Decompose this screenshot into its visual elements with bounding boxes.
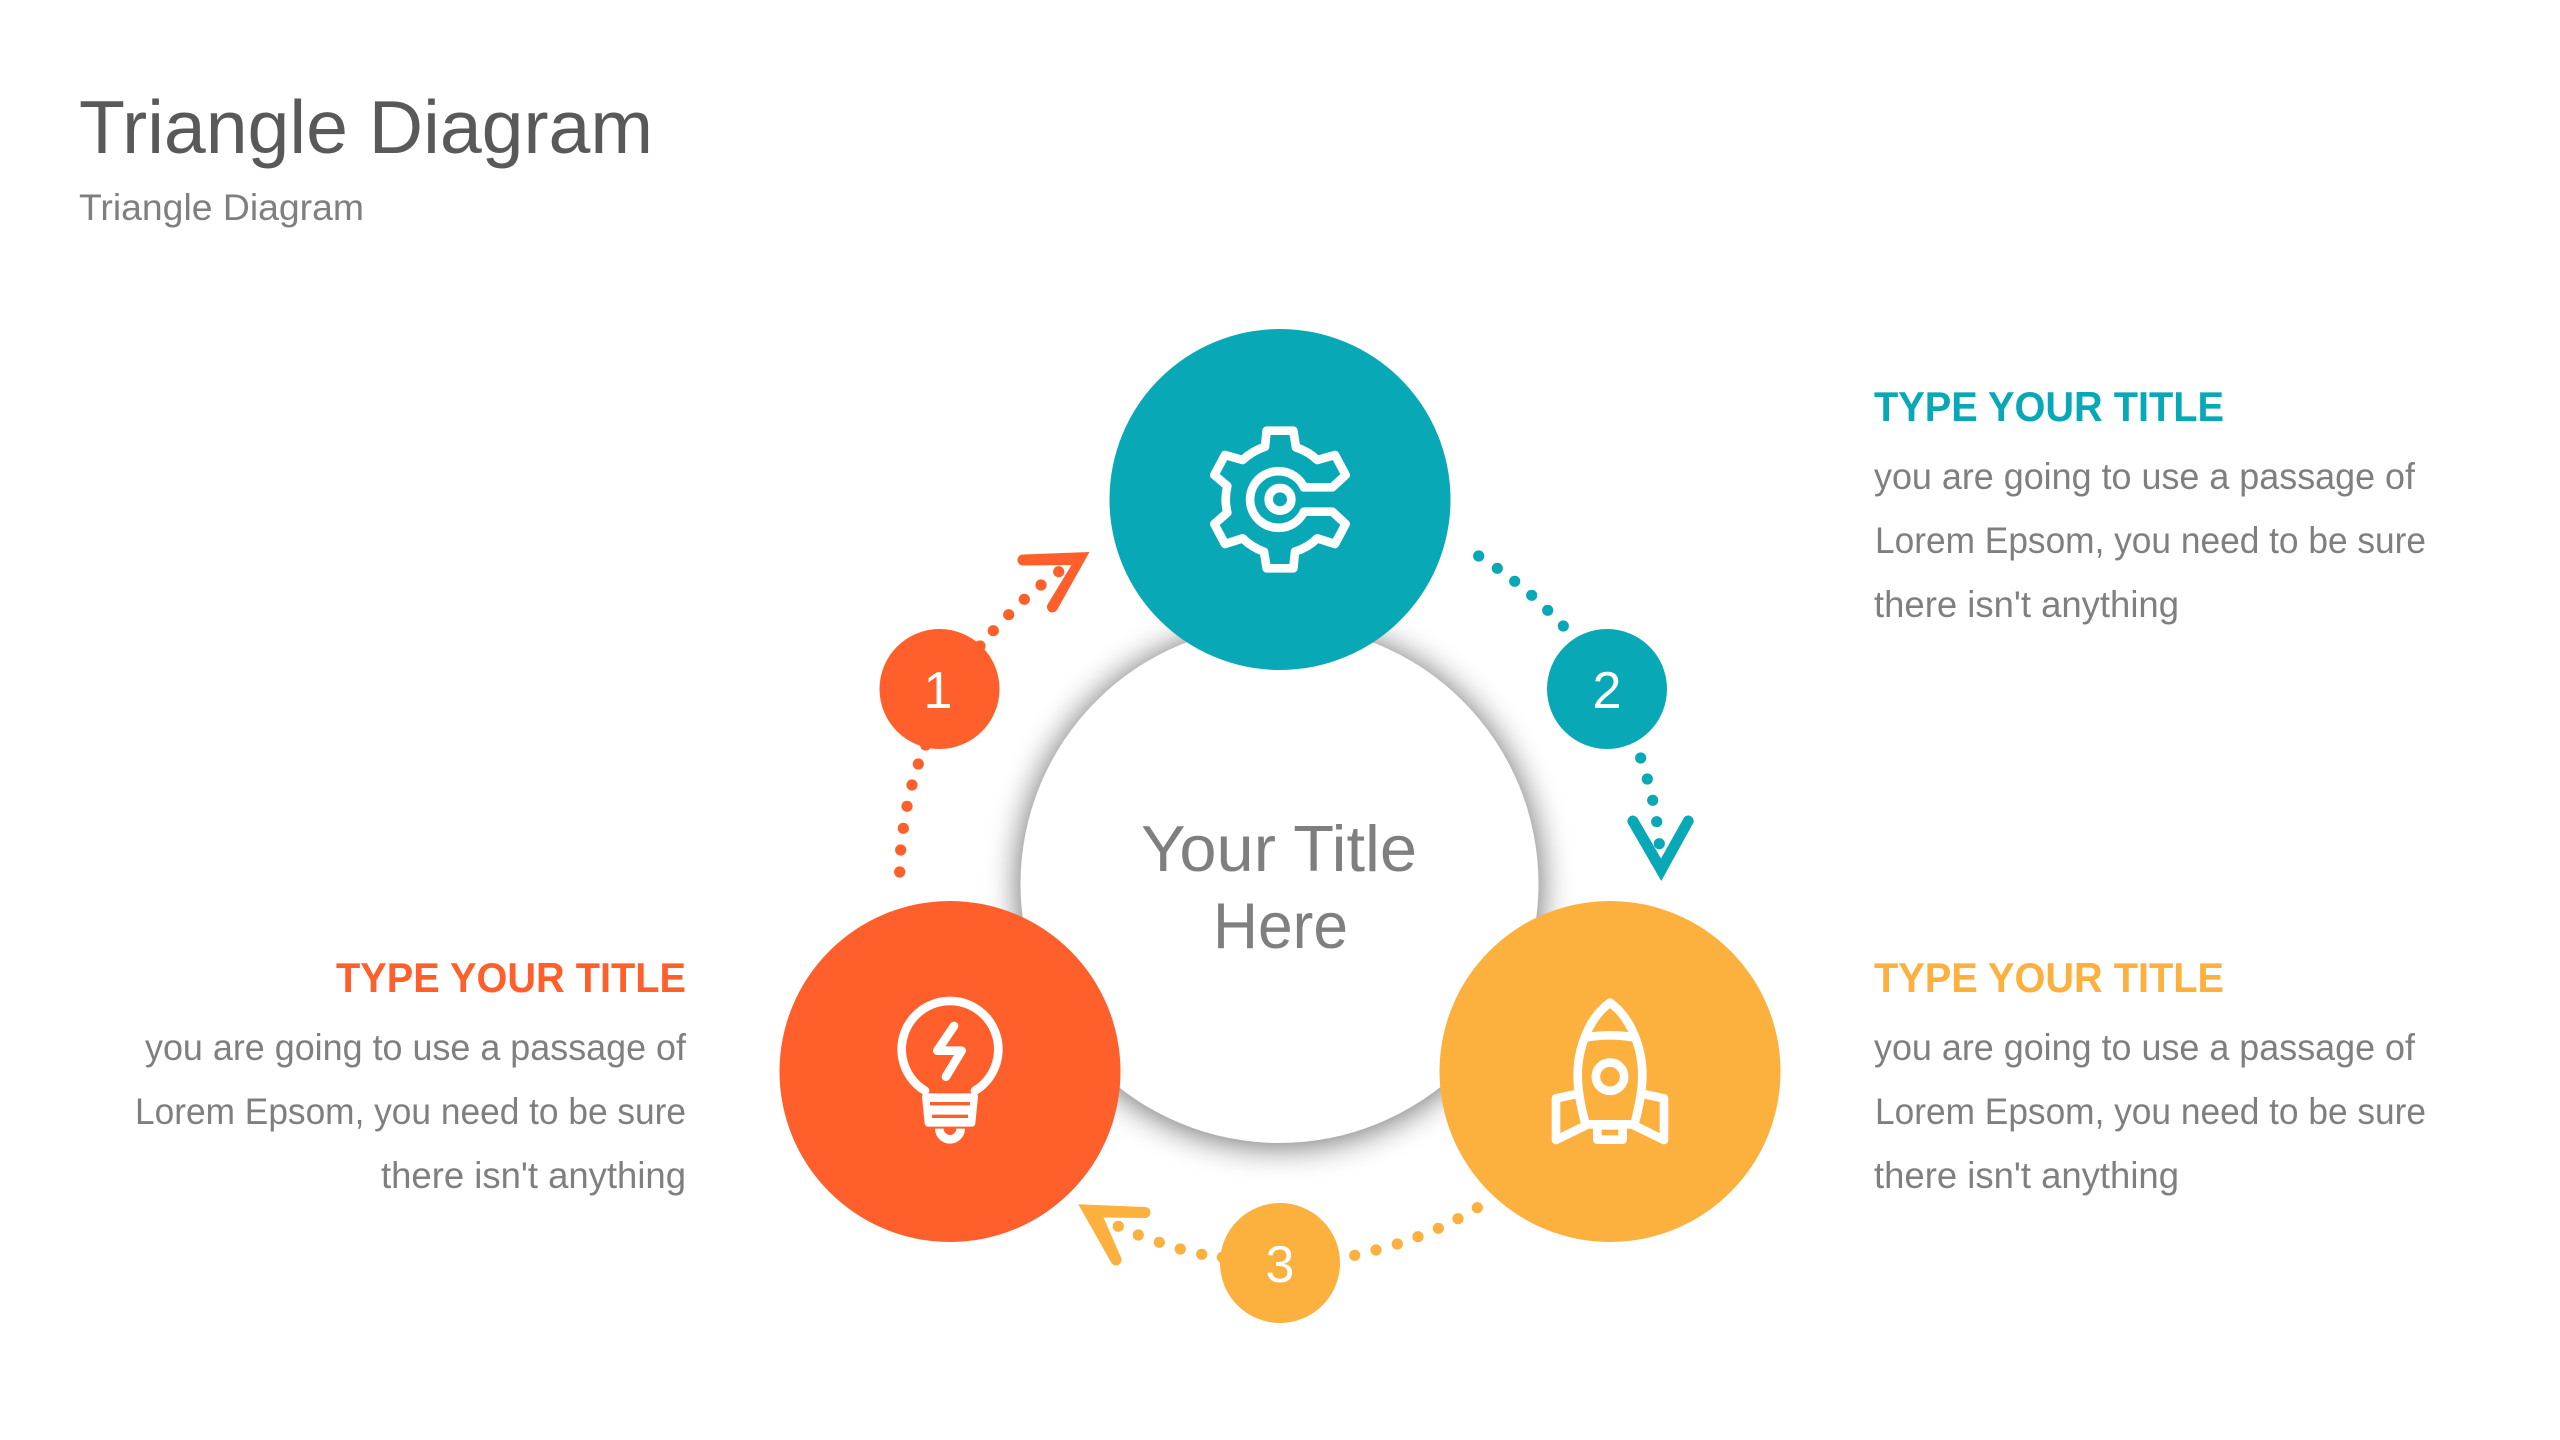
text block: bottom right: Lorem Epsom, you need to be sure — [1875, 1091, 2426, 1132]
text block: bottom left: you are going to use a passage of — [145, 1027, 687, 1068]
yellow circle with rocket icon — [1440, 901, 1780, 1242]
text block: bottom left — [135, 954, 687, 1196]
dotted arrow 2 (teal) — [1473, 550, 1694, 881]
central title — [1141, 812, 1417, 962]
text block: bottom left: TYPE YOUR TITLE — [336, 954, 686, 1001]
badge 1: 1 — [924, 662, 952, 720]
text block: top right — [1874, 383, 2426, 625]
icon: light bulb — [902, 1001, 998, 1139]
text block: bottom right: you are going to use a passage of — [1874, 1027, 2416, 1068]
text block: top right: TYPE YOUR TITLE — [1874, 383, 2224, 430]
icon: rocket — [1556, 1003, 1664, 1140]
badge 2: 2 — [1593, 662, 1621, 720]
text block: bottom right: there isn't anything — [1874, 1155, 2179, 1196]
text block: top right: there isn't anything — [1874, 584, 2179, 625]
central title: Your Title — [1141, 812, 1417, 885]
teal circle with gear icon — [1110, 329, 1450, 670]
title: Triangle Diagram — [79, 85, 653, 169]
text block: top right: you are going to use a passage of — [1874, 456, 2416, 497]
central title: Here — [1213, 889, 1348, 962]
text block: bottom right: TYPE YOUR TITLE — [1874, 954, 2224, 1001]
icon: gear — [1214, 431, 1346, 568]
badge 3 — [1220, 1203, 1340, 1323]
orange circle with bulb icon — [780, 901, 1120, 1242]
dotted arrow 1 (orange) — [894, 552, 1090, 878]
text block: bottom right — [1874, 954, 2426, 1196]
badge 1 — [880, 629, 1000, 749]
text block: bottom left: there isn't anything — [381, 1155, 686, 1196]
central circle with shadow — [1018, 625, 1540, 1147]
text block: bottom left: Lorem Epsom, you need to be sure — [135, 1091, 686, 1132]
badge 2 — [1547, 629, 1667, 749]
subtitle: Triangle Diagram — [79, 187, 364, 228]
dotted arrow 3 (yellow) — [1078, 1202, 1483, 1265]
text block: top right: Lorem Epsom, you need to be sure — [1875, 520, 2426, 561]
badge 3: 3 — [1266, 1236, 1294, 1294]
